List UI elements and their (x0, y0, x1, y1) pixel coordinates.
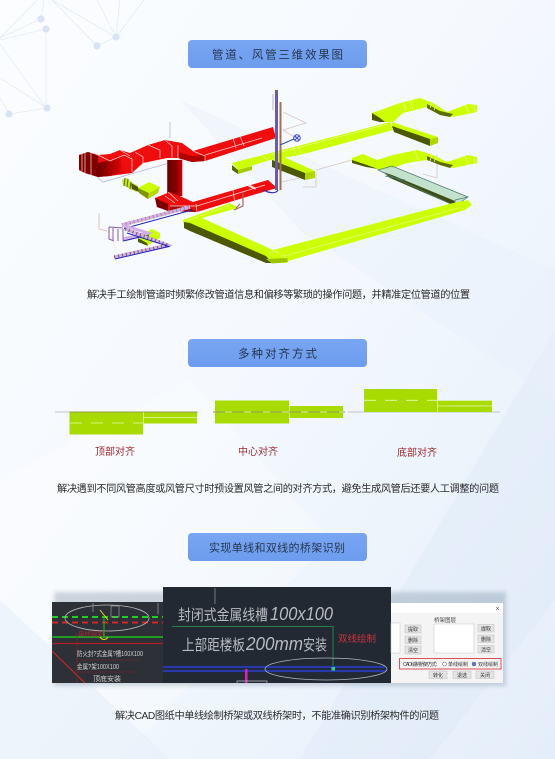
panel: CAD double-line screenshot: 双线绘制 (338, 633, 376, 645)
heading: 3D effect: 管道、风管三维效果图 (212, 48, 343, 62)
panel: recognition dialog: 删除 (408, 637, 418, 644)
panel: recognition dialog: 删除 (481, 636, 491, 643)
panel: CAD single-line screenshot (52, 602, 164, 683)
text: alignment description: 解决遇到不同风管高度或风管尺寸时预设置风管之间的对齐方式，避免生成风管后还要人工调整的问题 (57, 482, 499, 495)
diagram: center alignment (213, 400, 345, 424)
heading: alignment modes (188, 339, 367, 367)
panel: CAD single-line screenshot: 单线绘制 (78, 629, 104, 638)
green duct: upper right branch (392, 122, 438, 146)
green duct: selected transparent section (378, 166, 468, 206)
heading: alignment modes: 多种对齐方式 (238, 346, 318, 360)
red duct: vertical riser (167, 160, 182, 196)
label: bottom alignment: 底部对齐 (397, 446, 437, 459)
panel: recognition dialog: 清空 (408, 647, 418, 654)
panel: CAD double-line screenshot: 100x100 (270, 604, 333, 624)
green duct: upper trunk (232, 122, 393, 174)
panel: recognition dialog (391, 603, 503, 683)
red duct: lower main (155, 180, 277, 212)
panel: recognition dialog: 退选 (457, 672, 467, 679)
panel: recognition dialog: × (496, 606, 500, 613)
panel: CAD double-line screenshot: 安装 (303, 637, 327, 654)
decorative network: top left (0, 0, 144, 118)
pipe valve symbol (280, 135, 300, 145)
vertical pipe risers (234, 90, 282, 210)
screenshot shadow (54, 592, 506, 686)
green duct: upper elbow run (372, 98, 477, 122)
heading: 3D effect (188, 40, 367, 68)
heading: tray recognition: 实现单线和双线的桥架识别 (209, 540, 345, 554)
panel: CAD double-line screenshot: 200mm (245, 634, 303, 654)
panel: recognition dialog: 转化 (433, 672, 443, 679)
lower-left pipe bundle (99, 207, 192, 259)
panel: CAD double-line screenshot: 封闭式金属线槽 (178, 607, 268, 624)
panel: CAD double-line screenshot: 上部距楼板 (182, 636, 245, 654)
3D duct diagram (79, 90, 477, 264)
panel: recognition dialog: 桥架图层 (434, 616, 457, 624)
green duct: short branch (272, 157, 315, 180)
panel: recognition dialog: 单线绘制 (448, 661, 468, 668)
panel: recognition dialog: CAD绘制桥架方式: (403, 661, 437, 668)
panel: recognition dialog: 提取 (481, 626, 491, 632)
label: top alignment: 顶部对齐 (95, 445, 135, 458)
panel: recognition dialog: 提取 (408, 626, 418, 633)
small green reducer (122, 178, 160, 199)
panel: CAD double-line screenshot (163, 587, 391, 683)
panel: recognition dialog: 关闭 (480, 672, 490, 679)
heading: tray recognition (188, 533, 367, 561)
panel: recognition dialog: 双线绘制 (478, 661, 498, 668)
green duct: lower elbow run (352, 150, 477, 170)
red duct: upper main (79, 127, 276, 177)
panel: CAD single-line screenshot: 金属?架100X100 (77, 662, 119, 671)
faint routing lines (98, 112, 437, 187)
text: tray recognition description: 解决CAD图纸中单线绘制桥架或双线桥架时，不能准确识别桥架构件的问题 (115, 709, 439, 722)
panel: recognition dialog: 清空 (481, 646, 491, 654)
green duct: large return loop (183, 200, 472, 264)
panel: CAD single-line screenshot: 防火封?式金属?槽100X100 (77, 649, 143, 658)
green reducer behind pipe bundle (138, 229, 160, 246)
text: 3D effect description: 解决手工绘制管道时频繁修改管道信息和偏移等繁琐的操作问题，并精准定位管道的位置 (87, 288, 470, 301)
diagram: top alignment (55, 412, 199, 434)
label: center alignment: 中心对齐 (238, 445, 278, 458)
panel: CAD single-line screenshot: 顶底安装 (93, 674, 121, 683)
diagram: bottom alignment (348, 389, 500, 412)
